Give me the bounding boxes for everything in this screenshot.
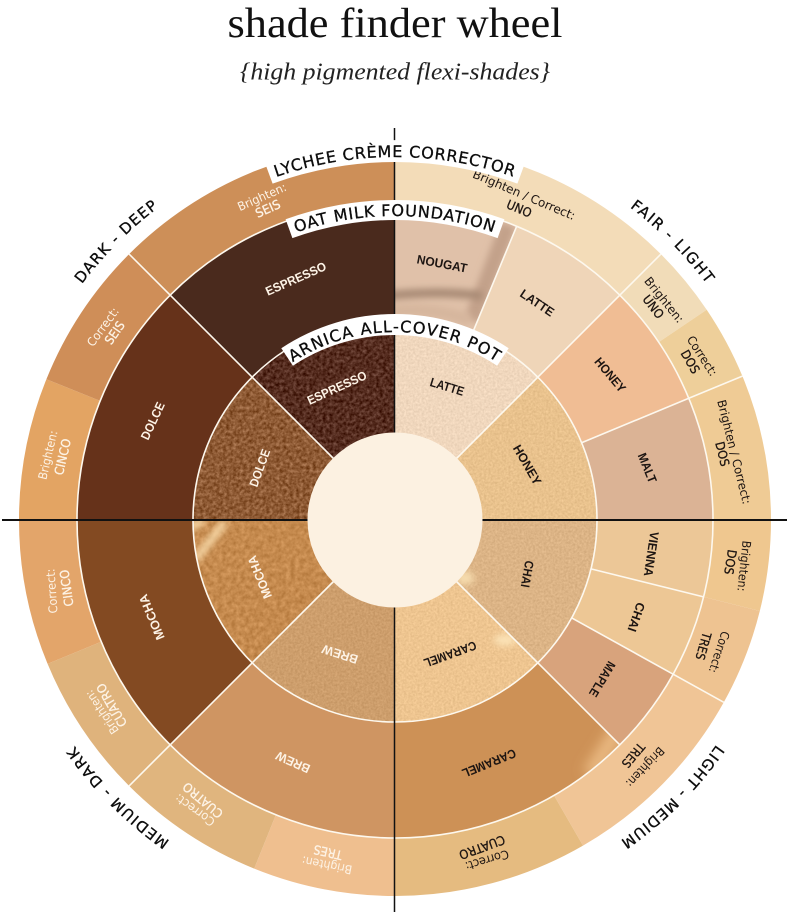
- segment: mocha: MOCHA: [245, 554, 275, 600]
- segment: malt: [582, 398, 713, 520]
- segment: brew: [170, 663, 395, 838]
- segment: brighten uno: UNO: [639, 292, 667, 322]
- segment: dolce: DOLCE: [247, 447, 273, 489]
- segment: chai: CHAI: [518, 559, 536, 589]
- segment: honey: HONEY: [591, 355, 629, 396]
- segment: maple: [538, 618, 673, 745]
- band label: lychee creme corrector: LYCHEE CRÈME CORRECTOR: [274, 142, 514, 177]
- segment: dolce: [77, 295, 252, 520]
- segment: correct dos: Correct:: [684, 333, 720, 379]
- segment: brighten tres left: Brighten:: [301, 853, 353, 877]
- segment: espresso: [252, 318, 395, 458]
- segment: brighten tres right: Brighten:: [623, 744, 667, 790]
- segment: brighten tres right: TRES: [619, 739, 649, 771]
- segment: correct cuatro left: [129, 745, 276, 869]
- segment: dolce: [193, 377, 334, 520]
- segment: brighten dos: DOS: [721, 549, 740, 576]
- segment: caramel: [395, 582, 538, 722]
- segment: correct tres: [673, 597, 760, 702]
- segment: maple: MAPLE: [586, 659, 618, 699]
- segment: brighten correct dos: [689, 376, 771, 520]
- segment: espresso: ESPRESSO: [305, 368, 369, 408]
- segment: brighten tres left: TRES: [312, 842, 345, 863]
- segment: brighten cinco: CINCO: [51, 437, 74, 477]
- segment: brew: BREW: [274, 748, 312, 776]
- segment: latte: [395, 318, 538, 458]
- segment: honey: [538, 295, 689, 443]
- region label: light - medium: LIGHT - MEDIUM: [621, 746, 725, 849]
- segment: brighten dos: [704, 520, 771, 611]
- segment: brighten seis: [129, 144, 395, 295]
- segment: vienna: [591, 520, 713, 597]
- segment: brighten cuatro: CUATRO: [93, 681, 130, 730]
- segment: correct cuatro left: CUATRO: [179, 779, 226, 822]
- segment: brighten cuatro: [48, 642, 170, 786]
- segment: honey: [456, 377, 597, 520]
- segment: brighten correct uno: Brighten / Correct:: [471, 167, 577, 223]
- segment: brighten correct dos: Brighten / Correct:: [714, 398, 754, 506]
- segment: correct cinco: Correct:: [43, 568, 61, 614]
- segment: brighten tres left: [254, 815, 395, 896]
- segment: vienna: VIENNA: [641, 531, 661, 577]
- segment: malt: MALT: [635, 451, 659, 485]
- title: shade finder wheel: [228, 1, 562, 47]
- segment: correct cinco: [19, 520, 101, 664]
- ring: lychee creme corrector: [19, 144, 771, 896]
- segment: brighten cinco: [19, 379, 100, 520]
- segment: correct dos: [659, 310, 742, 398]
- segment: caramel: CARAMEL: [421, 638, 478, 670]
- region label: dark - deep: DARK - DEEP: [74, 200, 154, 284]
- segment: brighten cinco: Brighten:: [36, 429, 60, 481]
- region label: medium - dark: MEDIUM - DARK: [66, 746, 169, 850]
- center circle: [308, 432, 482, 608]
- region label: fair - light: FAIR - LIGHT: [630, 199, 716, 281]
- band label: oat milk foundation: OAT MILK FOUNDATION: [294, 204, 496, 232]
- segment: correct cinco: CINCO: [56, 569, 77, 607]
- segment: chai: CHAI: [624, 601, 648, 633]
- segment: brighten seis: SEIS: [253, 196, 283, 221]
- segment: brighten correct dos: DOS: [712, 440, 733, 468]
- segment: latte: LATTE: [517, 287, 557, 319]
- segment: brighten seis: Brighten:: [235, 180, 289, 214]
- segment: latte: LATTE: [428, 375, 466, 399]
- band label: arnica all-cover pot: ARNICA ALL-COVER POT: [290, 320, 503, 362]
- segment: nougat: NOUGAT: [416, 252, 469, 276]
- segment: correct seis: Correct:: [84, 305, 122, 349]
- ring: oat milk foundation: [77, 202, 713, 838]
- segment: mocha: MOCHA: [136, 592, 168, 642]
- segment: brew: BREW: [320, 642, 360, 666]
- segment: brighten correct uno: UNO: [504, 197, 534, 221]
- segment: brighten tres right: [554, 674, 724, 846]
- segment: correct tres: TRES: [692, 630, 715, 662]
- segment: caramel: CARAMEL: [460, 746, 518, 780]
- segment: correct dos: DOS: [678, 347, 703, 376]
- segment: correct seis: SEIS: [101, 318, 128, 347]
- segment: latte: [472, 226, 620, 377]
- segment: correct cuatro right: Correct:: [463, 847, 511, 873]
- segment: correct cuatro right: CUATRO: [457, 832, 507, 863]
- segment: espresso: ESPRESSO: [263, 259, 329, 299]
- segment: correct seis: [46, 254, 170, 401]
- segment: espresso: [170, 202, 395, 377]
- segment: brew: [252, 582, 395, 722]
- segment: brighten correct uno: [395, 144, 661, 295]
- segment: correct tres: Correct:: [706, 629, 732, 675]
- ring: arnica all-cover pot: [190, 318, 597, 722]
- segment: brighten dos: Brighten:: [734, 540, 754, 592]
- segment: brighten uno: Brighten:: [641, 274, 687, 326]
- segment: honey: HONEY: [510, 442, 544, 488]
- segment: mocha: [190, 520, 334, 663]
- segment: caramel: [395, 663, 622, 838]
- segment: dolce: DOLCE: [138, 400, 168, 442]
- segment: mocha: [77, 520, 252, 745]
- segment: nougat: [395, 220, 516, 330]
- segment: chai: [456, 520, 597, 663]
- segment: brighten cuatro: Brighten:: [82, 687, 122, 737]
- segment: correct cuatro left: Correct:: [172, 791, 218, 829]
- segment: brighten uno: [620, 254, 707, 342]
- segment: correct cuatro right: [395, 795, 583, 896]
- subtitle: {high pigmented flexi-shades}: [240, 60, 550, 86]
- segment: chai: [572, 569, 704, 674]
